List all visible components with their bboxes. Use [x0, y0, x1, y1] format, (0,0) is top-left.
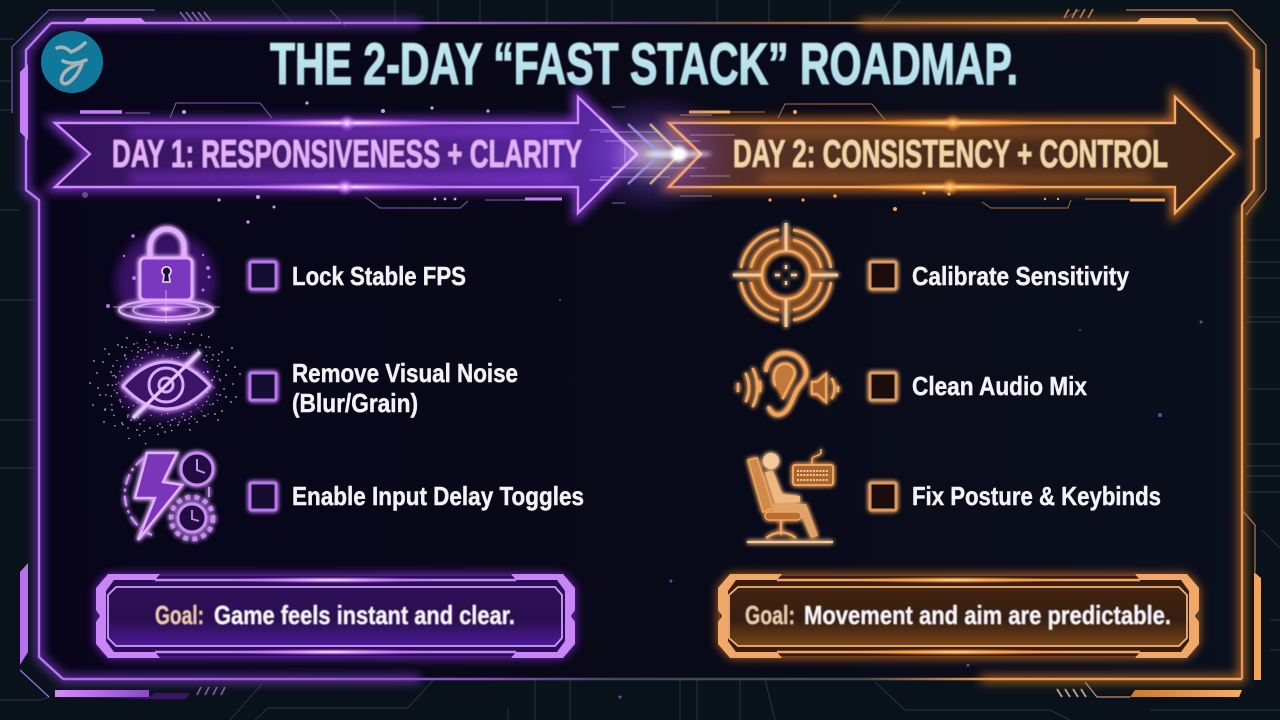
label: remove visual noise: [292, 358, 518, 418]
checkbox: input delay toggles: [250, 483, 276, 510]
checklist: day 2: [870, 261, 1161, 511]
icon: crossed-out eye with noise: [87, 309, 241, 458]
checkbox: clean audio mix: [870, 373, 896, 400]
goal text: Goal:: [155, 600, 204, 630]
label: lock stable fps: Lock Stable FPS: [292, 261, 466, 291]
label: posture and keybinds: Fix Posture & Keybinds: [912, 481, 1161, 511]
label: remove visual noise: (Blur/Grain): [292, 388, 418, 418]
goal text: Goal:: [745, 600, 795, 630]
label: input delay toggles: Enable Input Delay Toggles: [292, 481, 584, 511]
logo: [41, 31, 103, 93]
label: remove visual noise: Remove Visual Noise: [292, 358, 518, 388]
goal text: Game feels instant and clear.: [214, 600, 515, 630]
checkbox: lock stable fps: [250, 262, 276, 289]
goal text: Movement and aim are predictable.: [804, 600, 1171, 630]
flares day 1: [130, 114, 570, 196]
icon: seated person at keyboard: [747, 449, 833, 542]
arrow: day 2: [669, 97, 1234, 213]
checkbox: posture and keybinds: [870, 483, 896, 510]
flares day 2: [760, 114, 1150, 196]
details day 1: [80, 103, 625, 208]
arrow body day 2: [669, 97, 1234, 213]
arrow body day 1: [55, 97, 637, 213]
checklist: day 1: [250, 261, 584, 511]
details day 2: [689, 104, 1165, 208]
chevrons: [600, 118, 701, 190]
data streaks: [600, 107, 735, 203]
checkbox: remove visual noise: [250, 373, 276, 400]
arrow: day 1: [55, 97, 637, 224]
checkbox: calibrate sensitivity: [870, 262, 896, 289]
arrow junction burst: [570, 92, 740, 216]
icon: padlock: [106, 229, 220, 332]
arrow label: day 1: DAY 1: RESPONSIVENESS + CLARITY: [112, 133, 582, 176]
callout: day 2 goal: [718, 574, 1199, 658]
particles day 2: [768, 110, 1059, 211]
particles day 1: [82, 101, 490, 224]
icon: ear with sound waves: [738, 353, 838, 415]
icon: crosshair target: [733, 223, 838, 327]
icon: lightning bolt with clock and gear: [125, 453, 213, 540]
callout: day 1 goal: [96, 574, 575, 658]
ambient particles: [559, 299, 1202, 698]
label: clean audio mix: Clean Audio Mix: [912, 371, 1087, 401]
label: calibrate sensitivity: Calibrate Sensitivity: [912, 261, 1129, 291]
